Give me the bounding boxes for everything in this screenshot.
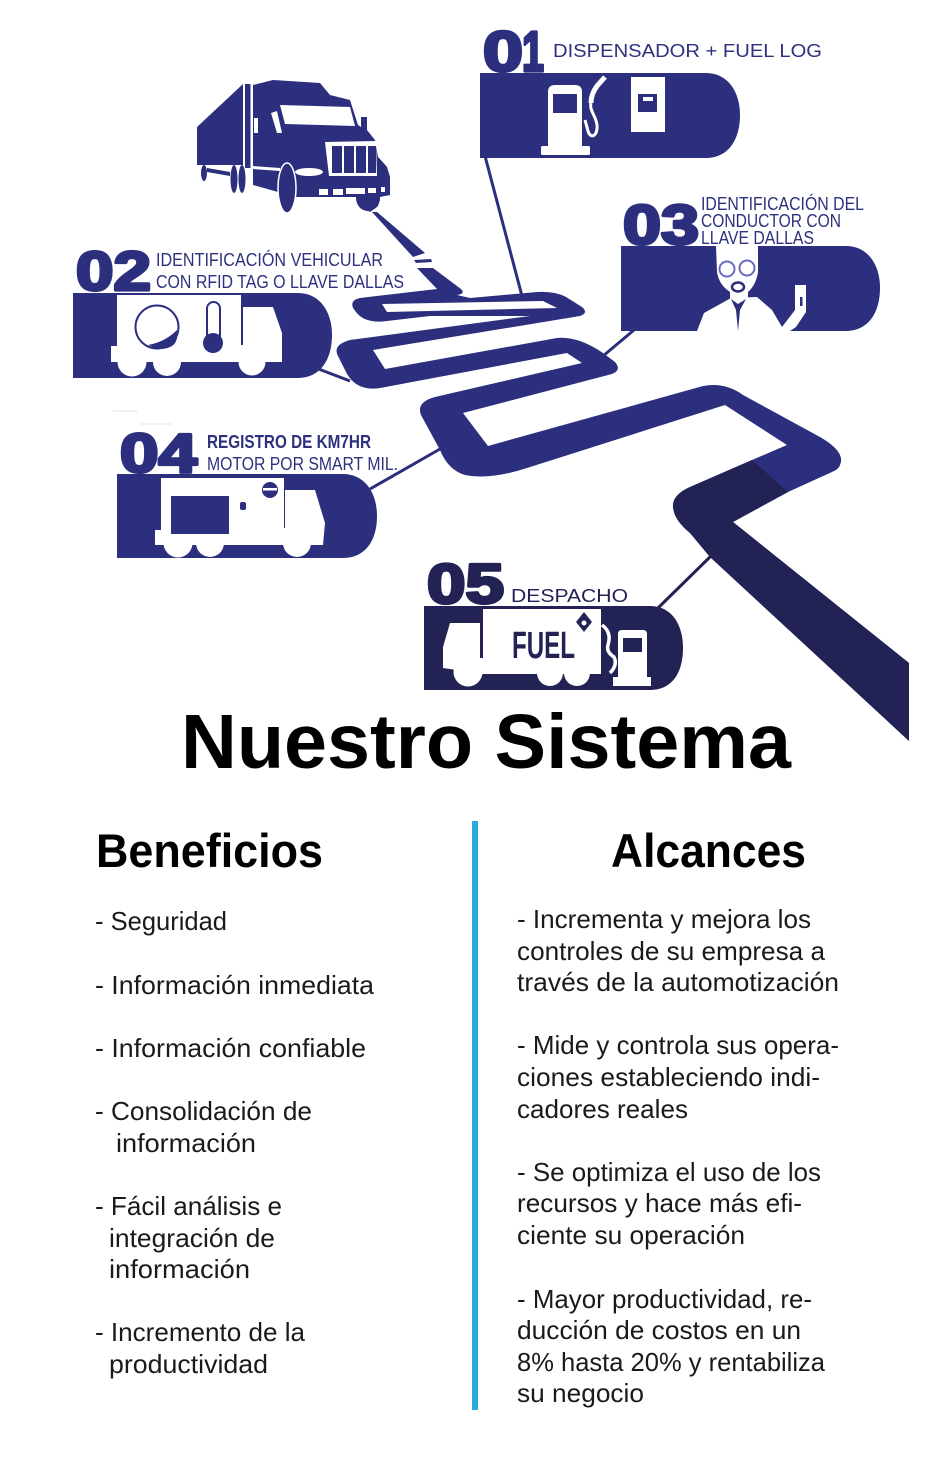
icon: fuel log device xyxy=(631,77,665,132)
list: alcances: ducción de costos en un xyxy=(517,1315,801,1345)
list: beneficios xyxy=(95,906,375,1379)
list: beneficios: información xyxy=(116,1128,256,1158)
step 03 label: LLAVE DALLAS xyxy=(701,228,814,248)
list: alcances: - Mide y controla sus opera- xyxy=(517,1030,839,1060)
step 01 label: DISPENSADOR + FUEL LOG xyxy=(553,41,822,61)
step 02 label: CON RFID TAG O LLAVE DALLAS xyxy=(156,272,404,292)
step 05 panel shape xyxy=(424,606,683,690)
step 05 label: DESPACHO xyxy=(511,586,628,606)
step 01 panel shape xyxy=(480,73,740,158)
step 05 number: 05 xyxy=(427,552,504,615)
list: alcances: través de la automotización xyxy=(517,967,839,997)
step 01 number xyxy=(483,20,544,84)
step 04 label: MOTOR POR SMART MIL. xyxy=(207,454,398,474)
list: alcances: controles de su empresa a xyxy=(517,936,826,966)
icon: semi truck xyxy=(197,80,390,213)
step 03 panel shape xyxy=(621,246,880,331)
step 04 panel shape xyxy=(117,474,377,558)
list: beneficios: - Seguridad xyxy=(95,906,227,936)
icon: white truck with gauge and thermometer xyxy=(111,295,282,376)
step 02 label xyxy=(156,249,404,292)
step 04 label xyxy=(207,432,398,474)
panel: beneficios xyxy=(95,824,375,1379)
list: beneficios: - Consolidación de xyxy=(95,1096,312,1126)
list: beneficios: productividad xyxy=(109,1349,268,1379)
list: alcances: 8% hasta 20% y rentabiliza xyxy=(517,1347,826,1377)
step 03: driver identification panel xyxy=(621,193,880,331)
title: Nuestro Sistema xyxy=(181,699,792,785)
list: alcances: ciones estableciendo indi- xyxy=(517,1062,820,1092)
step 02 number: 02 xyxy=(76,240,151,302)
step 04 number: 04 xyxy=(120,422,198,484)
step 02 panel shape xyxy=(73,293,332,378)
step 03 number: 03 xyxy=(623,193,699,256)
list: alcances xyxy=(517,904,839,1408)
list: alcances: - Mayor productividad, re- xyxy=(517,1284,812,1314)
list: beneficios: - Fácil análisis e xyxy=(95,1191,282,1221)
list: beneficios: - Información confiable xyxy=(95,1033,366,1063)
heading: alcances: Alcances xyxy=(611,824,806,877)
list: beneficios: - Incremento de la xyxy=(95,1317,306,1347)
road: dark final stretch xyxy=(673,460,909,741)
icon: fuel truck and pump xyxy=(443,609,651,686)
step 01 number: 0 xyxy=(483,20,523,84)
list: alcances: recursos y hace más efi- xyxy=(517,1188,802,1218)
list: alcances: - Incrementa y mejora los xyxy=(517,904,811,934)
step 04: km and engine hours panel xyxy=(113,411,398,558)
list: alcances: cadores reales xyxy=(517,1094,688,1124)
step 02 label: IDENTIFICACIÓN VEHICULAR xyxy=(156,249,383,270)
icon: fuel pump xyxy=(541,77,605,155)
icon: white truck with meter xyxy=(155,478,325,558)
list: alcances: ciente su operación xyxy=(517,1220,745,1250)
list: beneficios: información xyxy=(109,1254,250,1284)
winding road xyxy=(336,212,909,741)
road: inner stripe of the first loop xyxy=(382,301,557,312)
list: alcances: su negocio xyxy=(517,1378,644,1408)
column divider xyxy=(472,821,478,1410)
panel: alcances xyxy=(517,824,839,1408)
icon: fuel truck and pump: FUEL xyxy=(512,625,575,667)
list: beneficios: - Información inmediata xyxy=(95,970,375,1000)
list: beneficios: integración de xyxy=(109,1223,275,1253)
step 04 label: REGISTRO DE KM7HR xyxy=(207,432,371,452)
heading: beneficios: Beneficios xyxy=(96,824,323,877)
step 02: vehicle identification panel xyxy=(73,240,404,378)
list: alcances: - Se optimiza el uso de los xyxy=(517,1157,821,1187)
step 01: dispenser panel xyxy=(480,20,822,158)
icon: driver with key fob xyxy=(697,246,806,331)
faint artefact lines xyxy=(113,411,172,424)
step 03 label: IDENTIFICACIÓN DEL xyxy=(701,193,864,214)
connector lines between road and step panels xyxy=(316,156,712,608)
step 03 label: CONDUCTOR CON xyxy=(701,211,841,231)
step 03 label xyxy=(701,193,864,248)
step 05: dispatch panel xyxy=(424,552,683,690)
step 01 number: 1 xyxy=(522,20,544,84)
